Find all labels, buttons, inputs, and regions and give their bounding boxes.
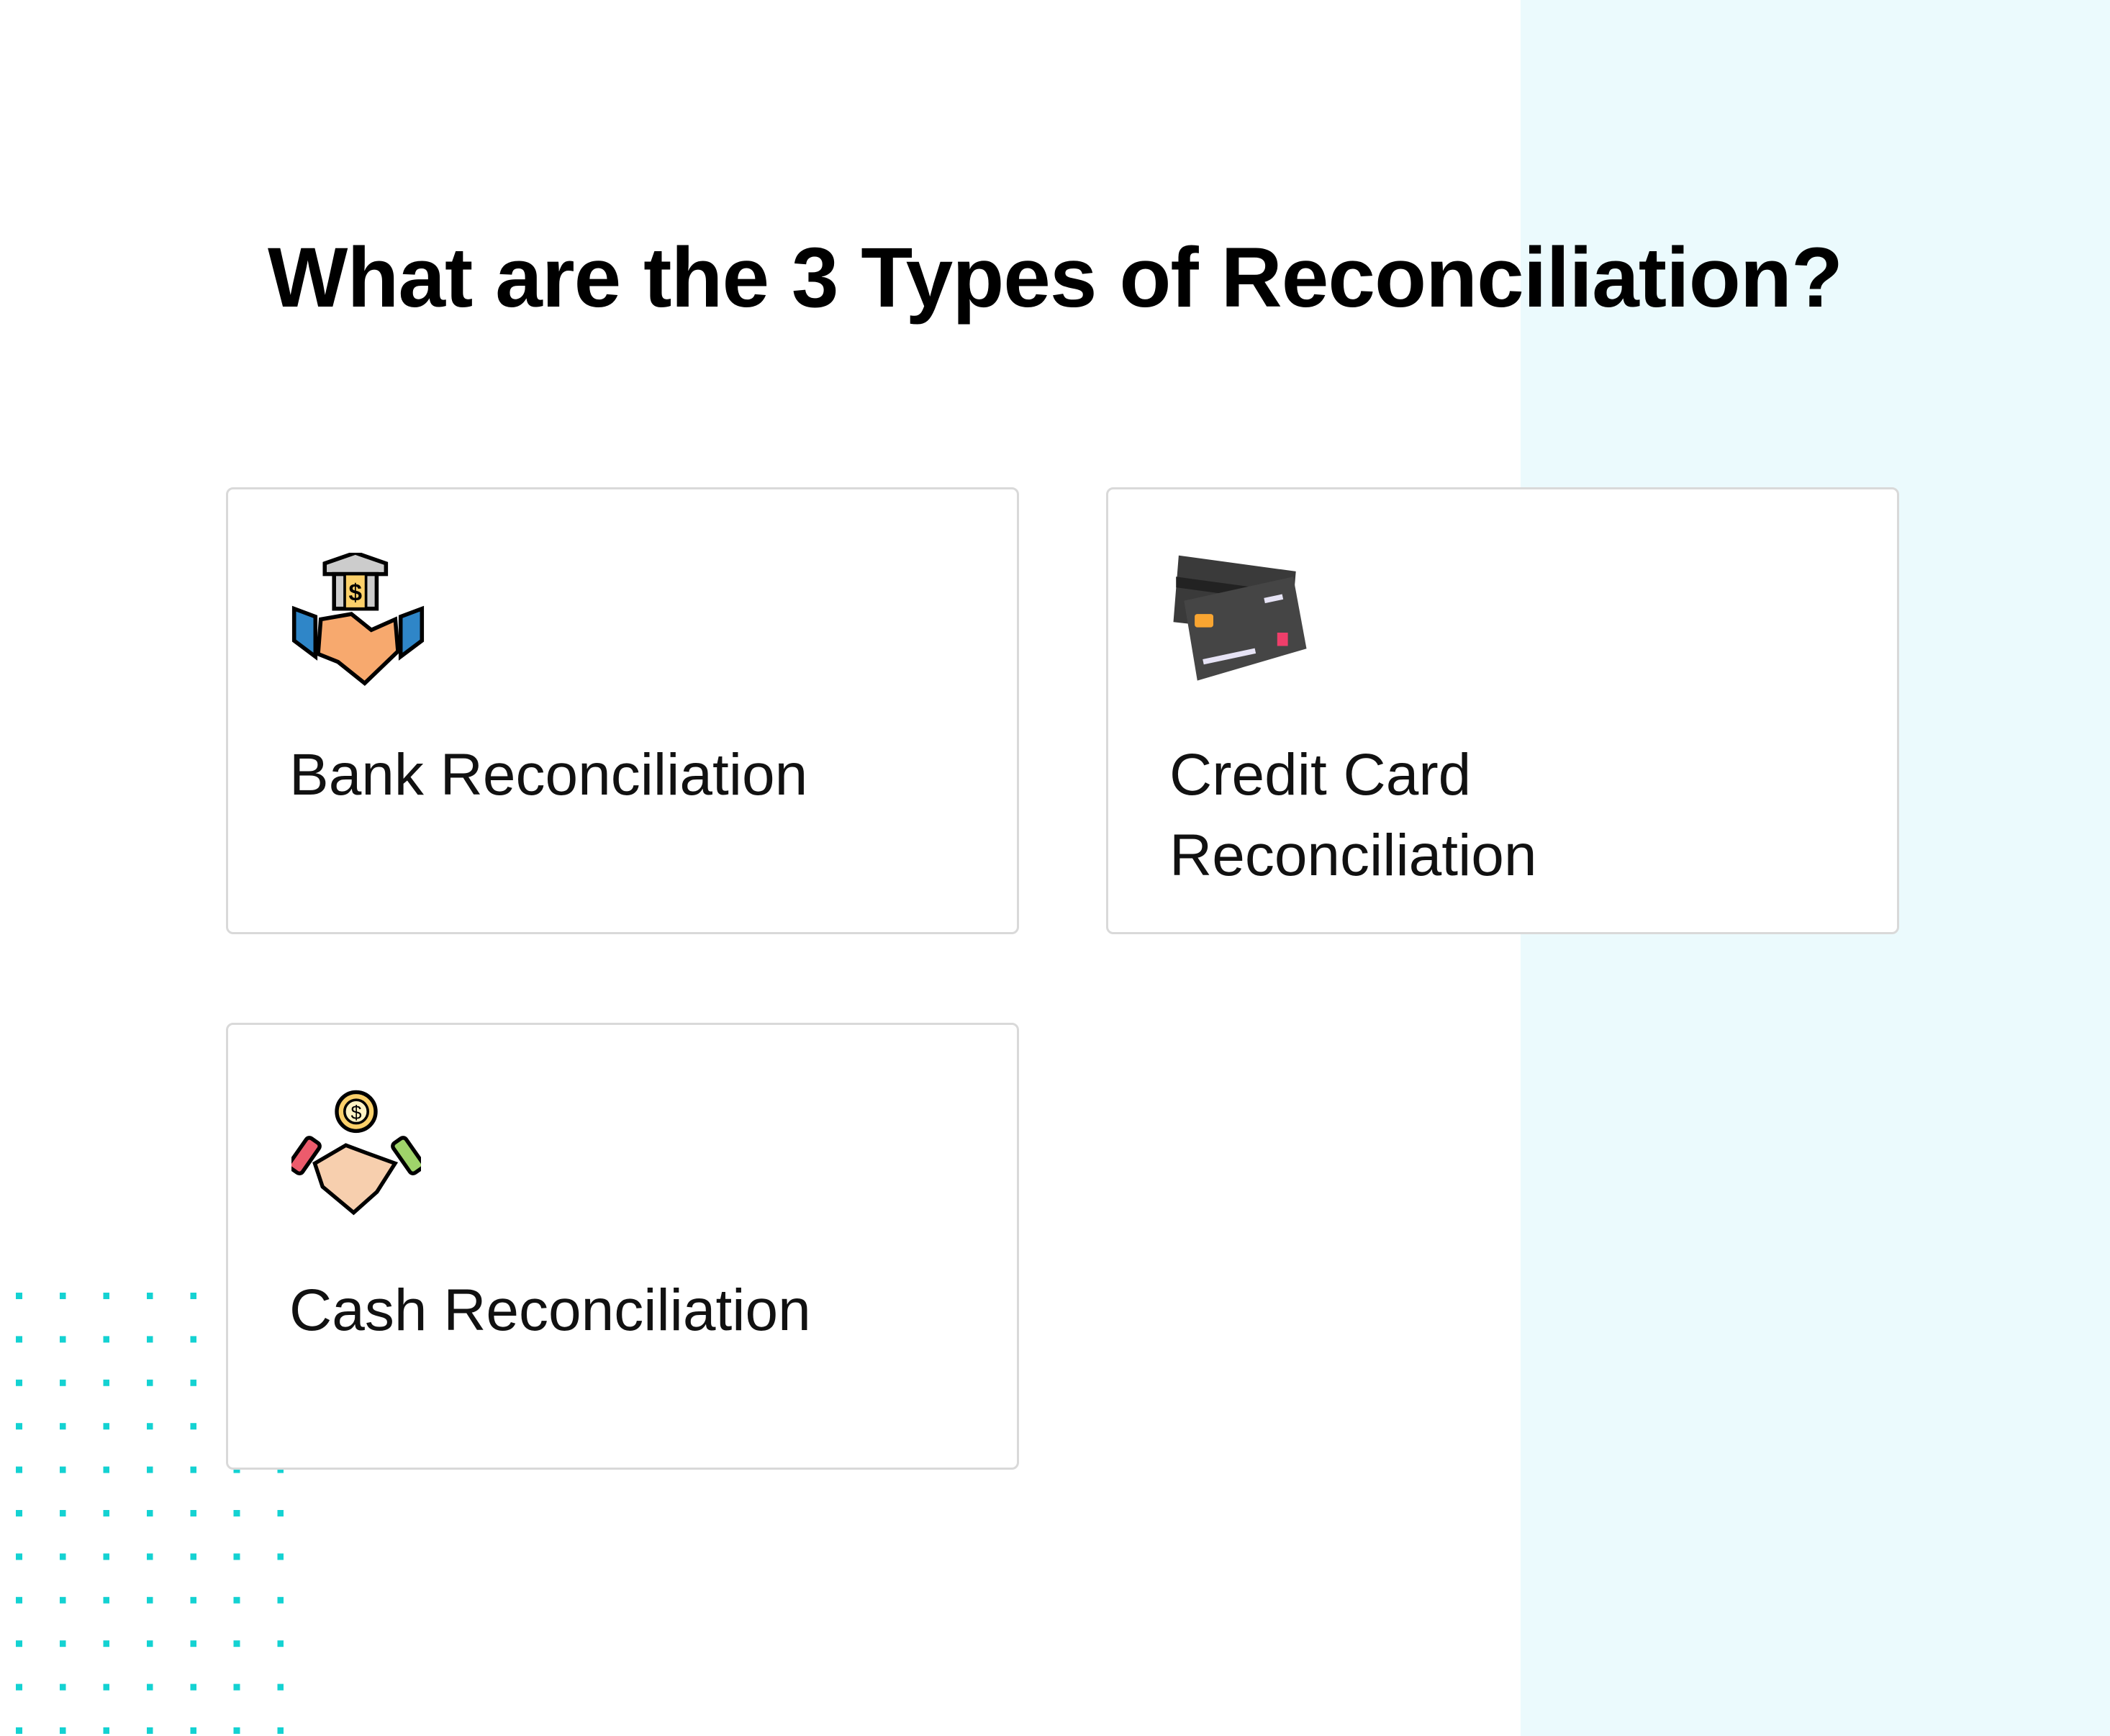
label: credit card — [1169, 742, 1537, 888]
icon: cash handshake — [291, 1090, 421, 1215]
icon: bank handshake — [292, 553, 425, 686]
panel: cash reconciliation — [226, 1023, 1019, 1470]
panel: credit card reconciliation — [1106, 487, 1899, 934]
dot pattern — [16, 1293, 284, 1734]
label: bank: Bank Reconciliation — [289, 742, 807, 808]
label: credit card: Credit Card — [1169, 742, 1471, 808]
title: What are the 3 Types of Reconciliation? — [268, 230, 1842, 325]
icon: credit cards — [1173, 556, 1307, 681]
label: cash: Cash Reconciliation — [289, 1278, 811, 1343]
panel: bank reconciliation — [226, 487, 1019, 934]
icon: cash handshake: $ — [350, 1102, 362, 1124]
icon: bank handshake: $ — [349, 580, 363, 607]
label: credit card: Reconciliation — [1169, 823, 1537, 888]
